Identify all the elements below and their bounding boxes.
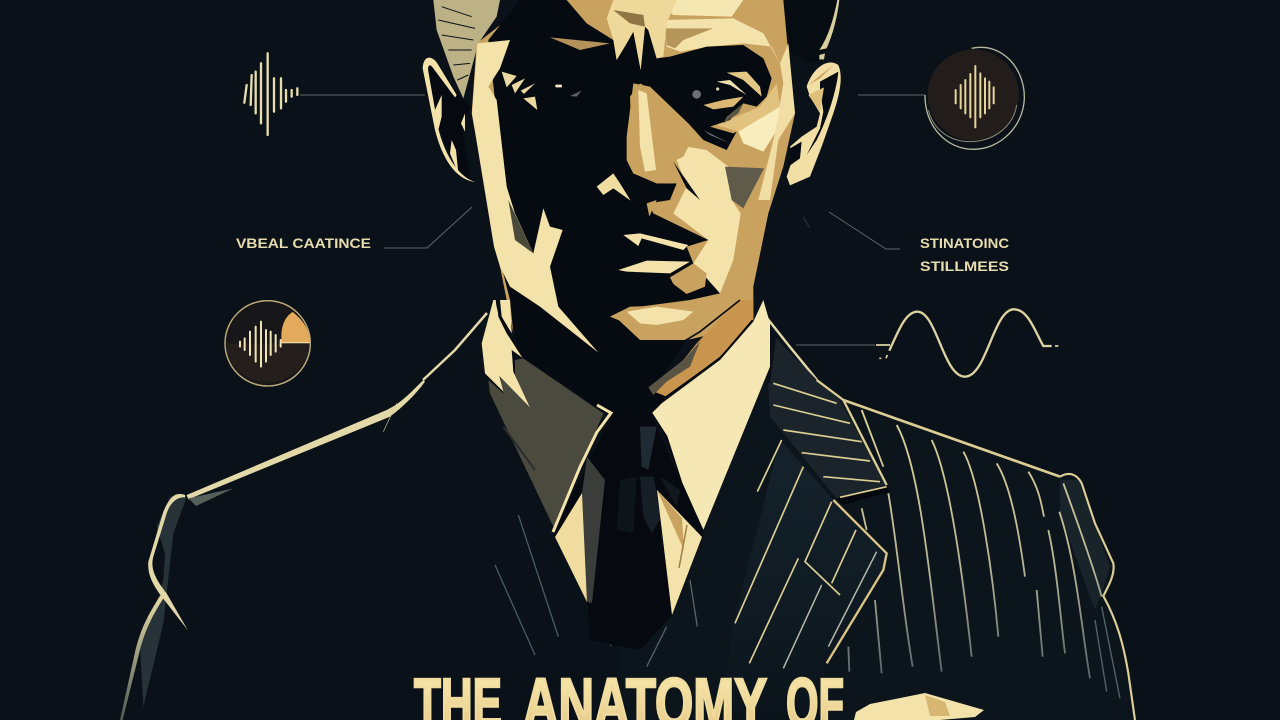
portrait head <box>423 0 841 380</box>
lip shadow gold <box>670 263 707 294</box>
cheek fold highlight <box>673 147 741 293</box>
cheek blob <box>738 107 780 152</box>
neck slash <box>497 300 523 357</box>
chin gold <box>610 300 720 338</box>
top forehead cream <box>663 0 743 17</box>
right shoulder upper line <box>767 318 817 380</box>
right shirt collar <box>652 300 770 532</box>
left shoulder upper line <box>423 313 487 380</box>
left shoulder and sleeve outline <box>120 380 612 720</box>
upper lapel extension <box>770 338 817 384</box>
tie side panel <box>582 457 605 603</box>
right hair <box>780 0 837 63</box>
under-eye cream <box>717 83 780 132</box>
vocal label: VBEAL CAATINCE <box>236 235 371 251</box>
face base <box>472 0 795 340</box>
connector line top right <box>858 94 925 96</box>
right ear and brow details <box>663 0 841 200</box>
tie <box>553 415 703 650</box>
chin cream <box>627 307 693 325</box>
right ear <box>787 62 841 185</box>
under-chin shadow <box>503 357 670 416</box>
lapel and pinstripes <box>647 380 1135 720</box>
right shirt front <box>657 490 702 615</box>
center forehead brown crease <box>613 10 645 27</box>
forehead band <box>663 18 780 63</box>
right cheek band <box>758 43 795 200</box>
left ear <box>423 58 475 182</box>
waveform icon left <box>244 53 297 135</box>
left eye glints <box>502 72 582 110</box>
neck group <box>482 300 753 527</box>
left neck sliver <box>500 300 512 333</box>
lower lip <box>618 261 690 273</box>
neck gray <box>648 342 700 395</box>
sine wave <box>876 309 1058 377</box>
jaw line <box>683 300 740 342</box>
suit jacket <box>120 313 1135 720</box>
face shadow <box>488 0 772 380</box>
strategic label: STINATOINC <box>920 235 1009 251</box>
title <box>414 664 984 720</box>
neck gold <box>650 300 753 397</box>
nose <box>627 83 700 217</box>
connector line left <box>384 207 472 248</box>
circle waveform icon <box>225 301 310 386</box>
callout: strategic stillness <box>796 47 1058 377</box>
collar edge <box>553 405 611 532</box>
left face strip <box>472 40 598 353</box>
cheek gray triangle <box>725 167 764 208</box>
collar, neck and tie <box>482 300 770 650</box>
olive left collar <box>488 358 603 527</box>
upper lip <box>623 233 688 250</box>
center forehead cream strands <box>607 0 677 70</box>
stillness label: STILLMEES <box>920 258 1009 274</box>
callout: vocal cadence <box>225 53 472 386</box>
small tick <box>803 217 810 228</box>
left hair <box>433 0 500 98</box>
right hair streak <box>819 0 839 59</box>
left shirt collar <box>482 300 530 407</box>
left shirt front <box>555 493 587 602</box>
collar crease <box>503 427 535 470</box>
connector line right <box>829 212 900 249</box>
connector line top left <box>300 94 425 96</box>
jacket right panel <box>620 380 1135 720</box>
right eye <box>692 72 762 143</box>
cheek slash <box>508 200 533 253</box>
connector line lower right <box>796 344 875 346</box>
nostril crescent <box>597 173 631 201</box>
forehead left streak <box>550 37 610 50</box>
hair strands at forehead <box>567 0 613 18</box>
cropped title shape <box>854 693 984 720</box>
dial waveform icon <box>925 47 1024 149</box>
brow gold patch <box>665 28 713 48</box>
